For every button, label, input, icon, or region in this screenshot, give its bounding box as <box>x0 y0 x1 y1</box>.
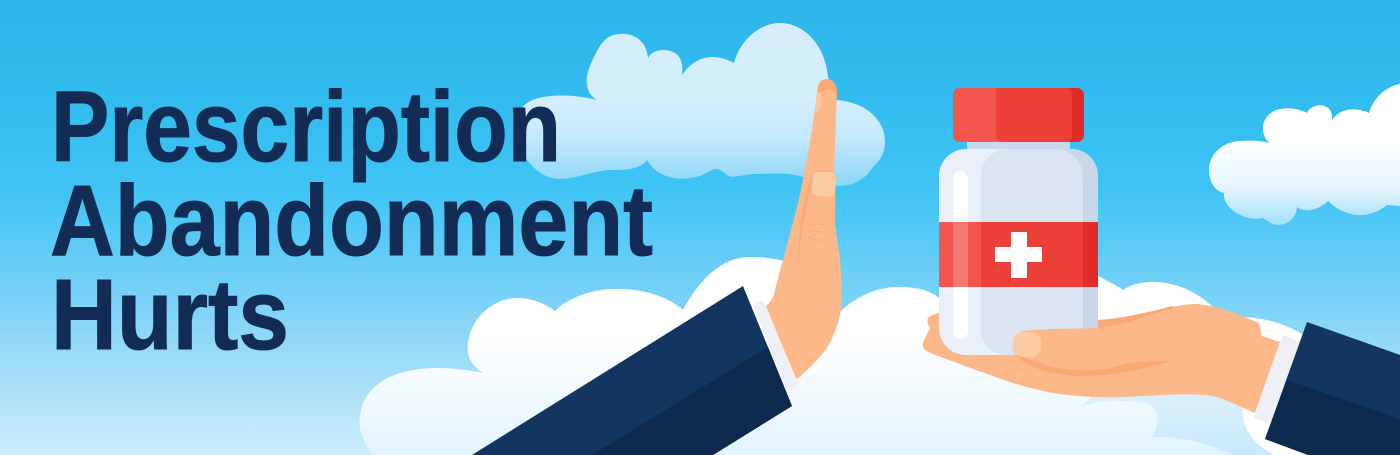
thumb <box>1013 304 1215 368</box>
sleeve shadow <box>1265 380 1400 455</box>
fingertip shading <box>817 79 837 95</box>
label band <box>939 222 1098 287</box>
sleeve <box>1265 322 1400 455</box>
icon: white medical cross <box>995 232 1042 278</box>
left hand raised in stop gesture <box>766 79 842 380</box>
right sleeve and cuff <box>1253 322 1400 455</box>
fingernail highlight <box>815 92 821 112</box>
glass highlight <box>953 171 968 339</box>
palm crease shadow <box>1015 355 1172 376</box>
thumb nail <box>1013 332 1041 357</box>
bottle body <box>939 149 1098 355</box>
sleeve <box>472 286 792 455</box>
label band left <box>939 222 981 287</box>
bottle body right shade <box>1010 149 1098 345</box>
bottle body centre <box>981 149 1083 355</box>
bottle cap <box>953 88 1084 142</box>
thumb crease line <box>796 176 815 287</box>
sleeve shadow <box>592 347 792 455</box>
thumb nail <box>812 172 836 197</box>
cloud: lower right white lobe <box>1243 395 1320 455</box>
cloud: lower right shaded lobe <box>1080 390 1290 455</box>
label band centre <box>939 222 1098 287</box>
medicine bottle <box>939 88 1098 355</box>
fingers shadow behind bottle <box>1098 306 1174 330</box>
knuckle wrinkles <box>808 224 828 240</box>
cap left highlight <box>953 88 1002 142</box>
cap centre <box>953 88 1072 142</box>
cap base <box>953 88 1084 142</box>
title <box>50 71 653 371</box>
shirt cuff <box>1253 335 1300 424</box>
shirt cuff <box>753 300 799 393</box>
cloud: bottom large <box>360 257 1320 455</box>
label band highlight <box>953 222 968 287</box>
title line 2: Abandonment <box>50 165 653 277</box>
right hand behind bottle <box>923 304 1280 413</box>
cloud: top centre <box>514 23 885 186</box>
title line 1: Prescription <box>51 71 561 183</box>
right hand thumb over bottle <box>1013 304 1215 376</box>
left sleeve and cuff <box>472 286 799 455</box>
label band right <box>1083 222 1098 287</box>
palm and fingers <box>766 79 842 380</box>
thumb outline <box>810 170 837 184</box>
title line 3: Hurts <box>51 259 289 371</box>
cloud: top right <box>1209 84 1400 225</box>
bottle neck <box>967 140 1070 152</box>
palm <box>923 304 1280 413</box>
